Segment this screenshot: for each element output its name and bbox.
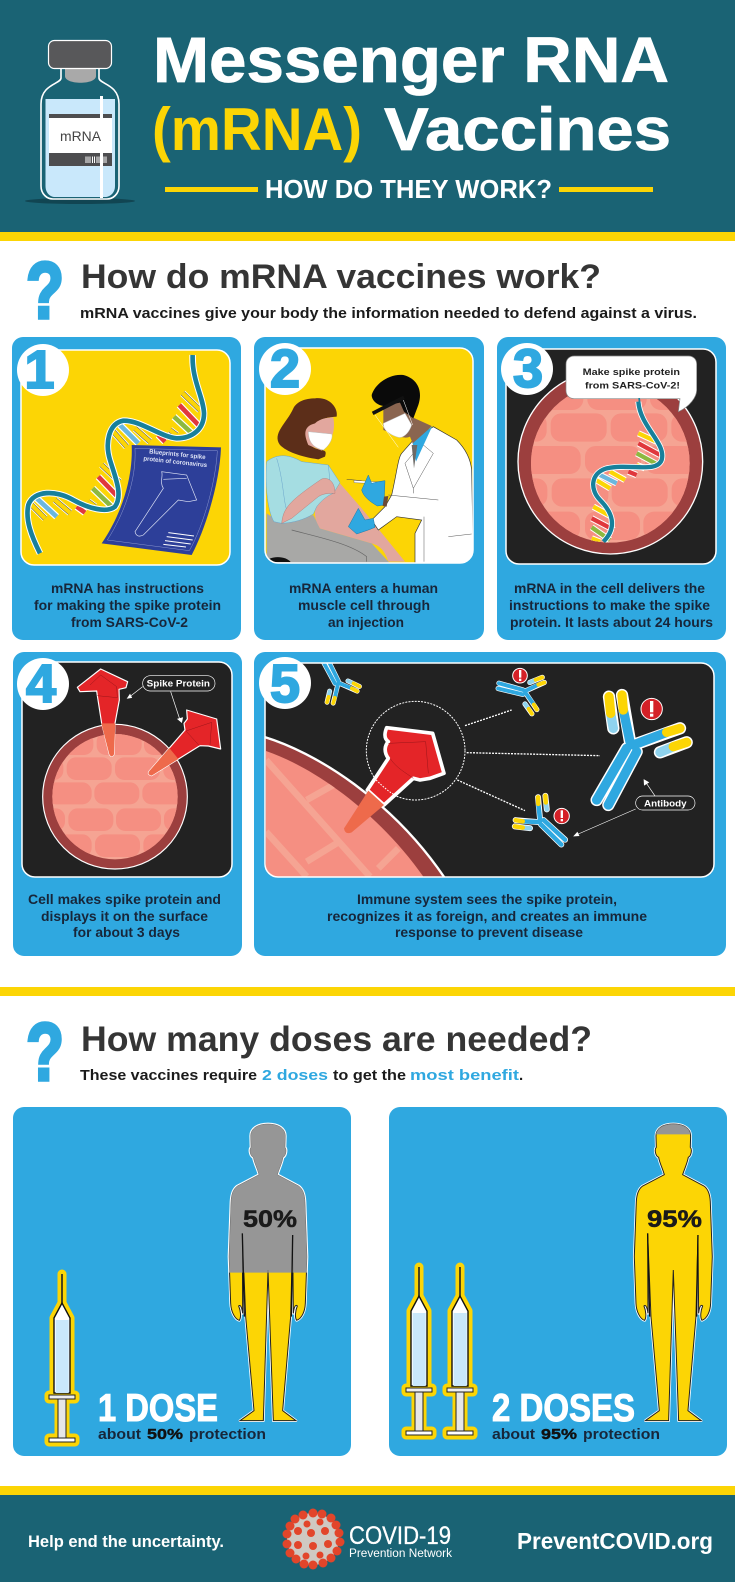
logo text: Prevention Network [349,1548,452,1560]
title [152,24,671,163]
speech bubble [566,356,697,413]
figure: person 50% protected [229,1124,307,1421]
subtitle [165,174,653,204]
caption [28,891,221,940]
step number 3: 3 [513,339,543,399]
label: spike protein [127,676,215,722]
dose text: protection [189,1426,266,1443]
dose text: 95% [541,1426,577,1443]
section heading: how do mRNA vaccines work: How do mRNA vaccines work? [81,258,601,296]
icon: mRNA vial [25,40,135,204]
dose text [98,1387,266,1443]
logo text [349,1522,452,1560]
caption: protein. It lasts about 24 hours [510,614,713,630]
caption [289,580,438,630]
step number 4: 4 [26,654,56,714]
panel: step 5 [254,652,726,956]
step number 3 [501,339,553,399]
caption: Immune system sees the spike protein, [357,891,617,907]
panel: 1 dose [13,1107,351,1456]
footer [0,1486,735,1582]
step number 4 [17,654,69,714]
caption: from SARS-CoV-2 [71,614,188,630]
label: antibody: Antibody [644,798,687,808]
alert icons [513,668,662,824]
caption: an injection [328,614,404,630]
icon: question mark: ? [26,246,64,335]
spike protein 1 [77,669,128,756]
step number 2 [259,339,311,399]
caption: recognizes it as foreign, and creates an immune [327,908,647,924]
panel: step 4 [13,652,242,956]
dose text: about [98,1426,141,1443]
caption [34,580,221,630]
logo text: COVID-19 [349,1522,451,1550]
caption: mRNA has instructions [51,580,204,596]
section heading: how do mRNA vaccines work [26,246,697,335]
step number 5 [259,654,311,714]
icon: question mark: ? [26,1007,64,1098]
illustration: mRNA strand and blueprint: Blueprints for spike [149,448,206,461]
icon: two syringes [406,1267,473,1435]
caption: mRNA enters a human [289,580,438,596]
title: (mRNA) [152,96,362,163]
caption: response to prevent disease [395,924,583,940]
icon: syringe [49,1274,75,1442]
panel: step 3 [497,337,726,640]
icon: coronavirus logo [282,1508,344,1570]
label: antibody [574,780,695,836]
section heading: how many doses are needed: . [519,1067,523,1084]
subtitle: HOW DO THEY WORK? [265,174,552,204]
dose text: 2 DOSES [492,1387,635,1430]
title: Vaccines [384,96,671,163]
caption: displays it on the surface [41,908,208,924]
speech bubble: Make spike protein [583,367,680,377]
illustration: mRNA strand and blueprint [27,355,221,555]
label: spike protein: Spike Protein [147,678,210,688]
section heading: how many doses are needed: How many doses are needed? [81,1020,592,1059]
panel: step 2 [254,337,484,640]
figure: person 95% protected [634,1124,712,1421]
caption: instructions to make the spike [509,597,710,613]
section heading: how many doses are needed [26,1007,592,1098]
illustration: mRNA strand and blueprint: protein of coronavirus [143,455,208,469]
step number 1 [17,340,69,400]
caption: for making the spike protein [34,597,221,613]
dashed magnifier circle and lines [366,701,600,811]
dose text: about [492,1426,535,1443]
section heading: how many doses are needed: most benefit [410,1067,519,1084]
section heading: how do mRNA vaccines work: mRNA vaccines give your body the information needed to defend against a virus. [80,305,697,322]
caption [509,580,713,630]
caption [327,891,647,940]
icon: mRNA vial: mRNA [60,128,102,144]
illustration: cell displaying spike proteins [33,669,221,869]
header banner [0,0,735,232]
illustration: cell with mRNA [510,356,708,554]
website: PreventCOVID.org [517,1528,713,1554]
illustration: immune system recognising spike protein [260,658,695,878]
antibodies [497,672,687,845]
title: Messenger RNA [153,24,669,96]
caption: Cell makes spike protein and [28,891,221,907]
dose text: 1 DOSE [98,1387,218,1430]
large spike protein [344,728,444,833]
step number 2: 2 [270,339,300,399]
step number 5: 5 [270,654,300,714]
panel: step 1 [12,337,241,640]
section heading: how many doses are needed: These vaccines require [80,1067,257,1084]
section heading: how many doses are needed: 2 doses [262,1067,328,1084]
caption: for about 3 days [73,924,180,940]
label: 50%: 50% [243,1206,297,1233]
section heading: how many doses are needed: to get the [333,1067,406,1084]
illustration: patient receiving injection [266,375,473,563]
panel: 2 doses [389,1107,727,1456]
speech bubble: from SARS-CoV-2! [585,381,680,391]
spike protein 2 [148,710,221,776]
caption: mRNA in the cell delivers the [514,580,705,596]
caption: muscle cell through [298,597,430,613]
step number 1: 1 [24,340,55,400]
tagline: Help end the uncertainty. [28,1532,224,1551]
dose text: 50% [147,1426,183,1443]
antibody top-left [321,664,362,706]
dose text: protection [583,1426,660,1443]
label: 95%: 95% [647,1206,702,1233]
